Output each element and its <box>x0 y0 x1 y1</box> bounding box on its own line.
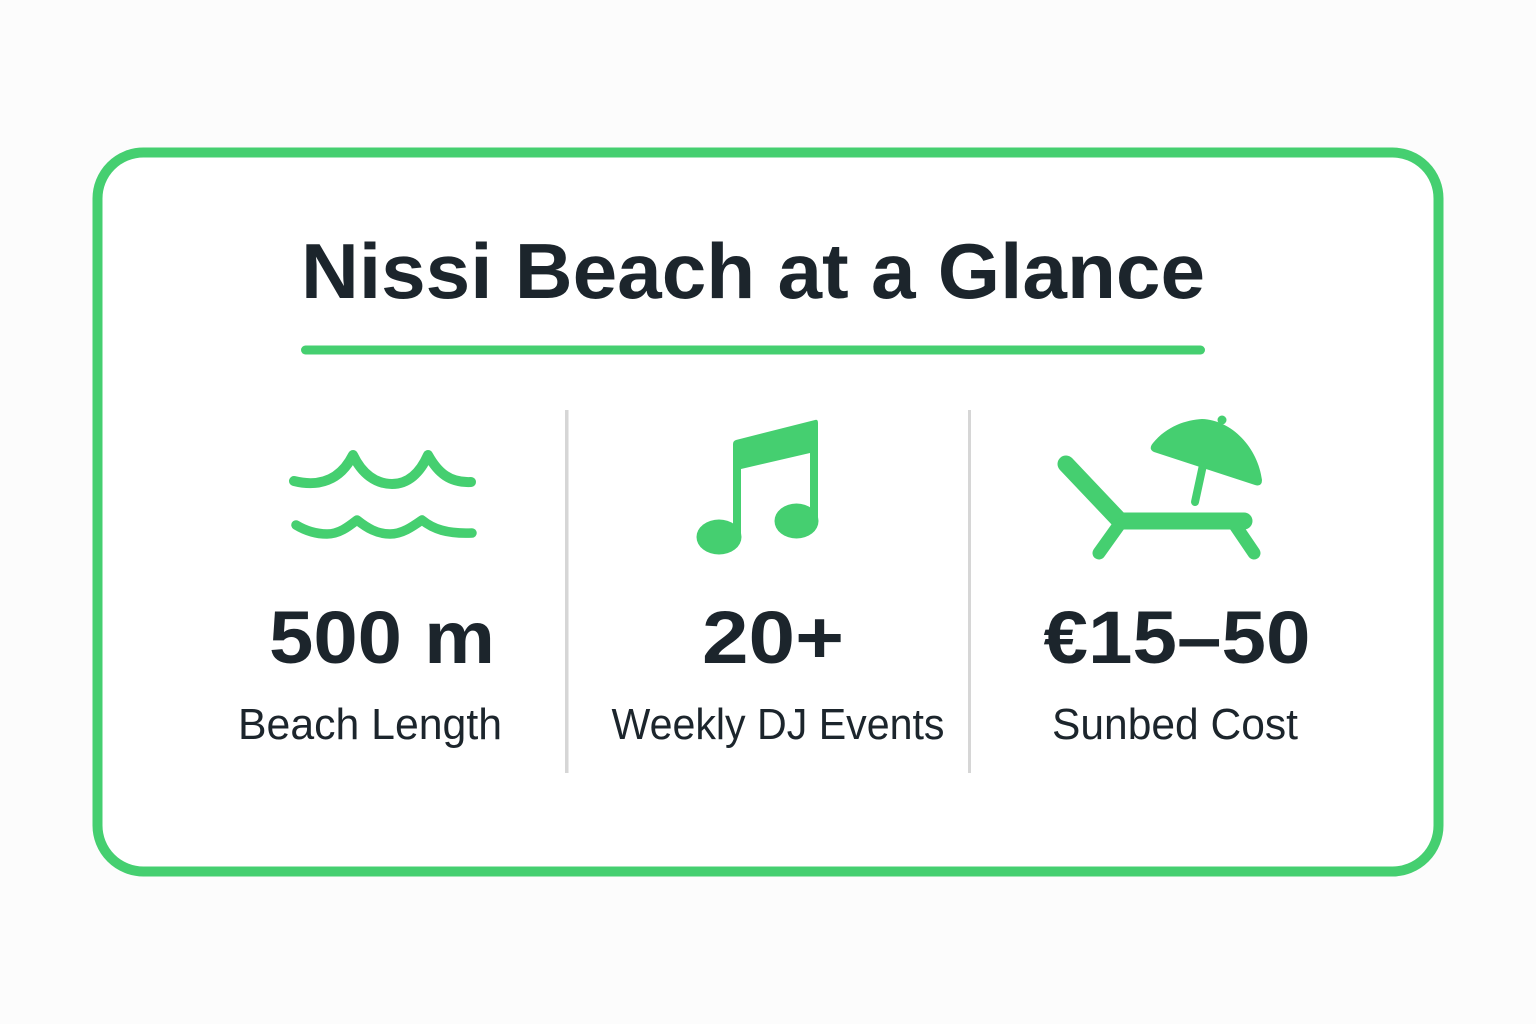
label: Beach Length: Beach Length <box>238 700 502 749</box>
icon: sunbed with umbrella <box>1066 416 1262 553</box>
panel: card <box>98 152 1438 872</box>
divider left <box>565 410 568 773</box>
label: Sunbed Cost: Sunbed Cost <box>1052 700 1298 749</box>
divider right <box>968 410 971 773</box>
label: Weekly DJ Events: Weekly DJ Events <box>612 700 944 749</box>
title underline <box>301 346 1205 354</box>
stat: 500 m: 500 m <box>269 596 495 679</box>
title: Nissi Beach at a Glance <box>301 227 1205 315</box>
stat: sunbed price: €15–50 <box>1044 596 1310 679</box>
icon: waves <box>294 455 472 534</box>
icon: music note <box>696 420 818 554</box>
stat: 20+: 20+ <box>702 596 844 679</box>
